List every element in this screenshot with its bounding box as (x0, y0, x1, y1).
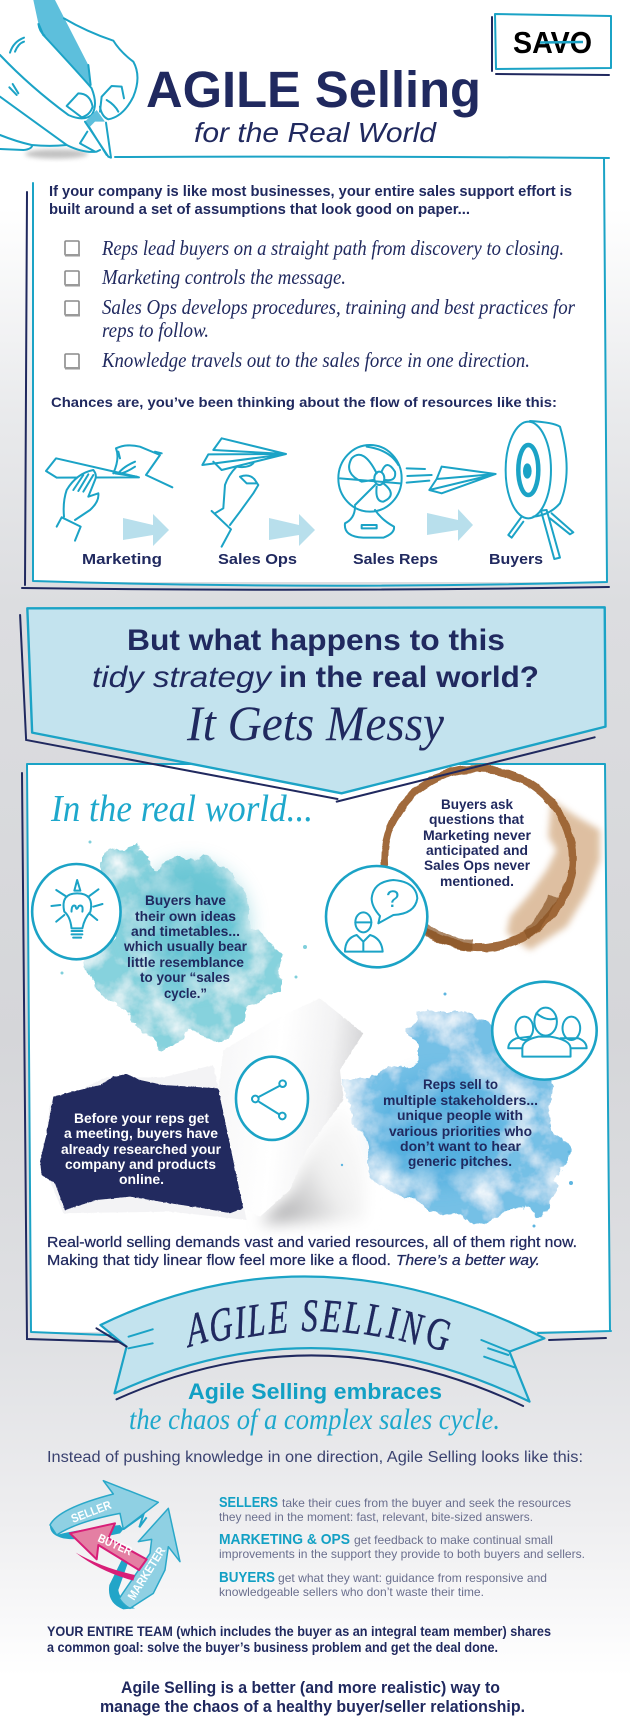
blue watercolor splash (341, 992, 573, 1228)
icon: hands folding paper (46, 445, 172, 541)
closing text: Making that tidy linear flow feel more like a flood. (47, 1253, 391, 1269)
coffee stain (384, 769, 600, 950)
icon: stakeholders (492, 982, 597, 1080)
ribbon text: I (384, 1295, 403, 1350)
ribbon text: L (341, 1290, 363, 1345)
flow labels: Buyers (489, 551, 543, 568)
icon: share nodes (236, 1057, 308, 1140)
icon: target (506, 421, 573, 559)
ribbon text: E (266, 1290, 289, 1345)
ribbon text: A (181, 1300, 210, 1358)
banner subheading (92, 661, 539, 694)
checklist: Reps lead buyers on a straight path from discovery to closing. (101, 236, 564, 260)
subtitle: for the Real World (194, 117, 438, 148)
arrow labels: MARKETER (125, 1544, 168, 1603)
text: buyers have: little resemblance (127, 955, 244, 970)
banner subheading: in the real world? (279, 661, 539, 694)
banner: but what happens (20, 607, 606, 802)
ribbon: agile selling (96, 1276, 544, 1406)
text: sellers, marketing, buyers: take their cues from the buyer and seek the resources (282, 1496, 571, 1510)
text: buyers ask: mentioned. (440, 874, 514, 889)
text: reps sell: unique people with (397, 1108, 523, 1123)
text: reps sell: various priorities who (389, 1124, 532, 1139)
panel: in the real world (22, 764, 611, 1342)
text: before your reps: Before your reps get (74, 1111, 210, 1126)
arrow labels (69, 1498, 168, 1603)
text: sellers, marketing, buyers: BUYERS (219, 1569, 275, 1586)
text: buyers ask: anticipated and (426, 843, 528, 858)
text: reps sell: multiple stakeholders... (383, 1093, 538, 1108)
text: buyers have: cycle.” (164, 986, 207, 1001)
torn paper (40, 998, 367, 1223)
flow labels (82, 551, 543, 568)
ribbon text: G (423, 1304, 454, 1363)
conclusion: Agile Selling is a better (and more realistic) way to (121, 1679, 500, 1697)
text: buyers have: their own ideas (135, 909, 236, 924)
icon: light bulb (32, 864, 121, 959)
buyer arrow (70, 1523, 147, 1581)
icon: fan blowing paper plane (338, 445, 496, 538)
text: buyers have: Buyers have (145, 893, 226, 908)
text: buyers have (123, 893, 248, 1001)
intro text: If your company is like most businesses, your entire sales support effort is (49, 184, 572, 200)
heading: agile selling embraces: Agile Selling embraces (188, 1379, 442, 1404)
text: sellers, marketing, buyers: get feedback to make continual small (354, 1533, 553, 1547)
text: before your reps: company and products (65, 1157, 216, 1172)
text: sellers, marketing, buyers: MARKETING & OPS (219, 1531, 350, 1548)
intro sentence: Instead of pushing knowledge in one direction, Agile Selling looks like this: (47, 1449, 583, 1466)
text: before your reps: a meeting, buyers have (64, 1126, 219, 1141)
text: sellers, marketing, buyers: knowledgeable sellers who don’t waste their time. (219, 1585, 484, 1599)
text: reps sell: Reps sell to (423, 1077, 498, 1092)
text: sellers, marketing, buyers: get what they want: guidance from responsive and (278, 1571, 547, 1585)
flow diagram (46, 421, 573, 559)
closing text (47, 1235, 577, 1269)
flow labels: Marketing (82, 551, 162, 568)
intro text (49, 184, 572, 218)
ribbon text: S (301, 1289, 318, 1341)
ribbon text: N (397, 1299, 427, 1357)
ribbon text: I (232, 1295, 250, 1350)
closing text: There’s a better way. (396, 1253, 540, 1269)
flow caption: Chances are, you’ve been thinking about the flow of resources like this: (51, 394, 557, 410)
intro text: built around a set of assumptions that look good on paper... (49, 202, 470, 218)
arrow labels: BUYER (96, 1531, 135, 1558)
diagram: agile cycle arrows (50, 1481, 180, 1609)
logo: SAVO (492, 14, 611, 75)
banner subheading: tidy strategy (92, 661, 273, 694)
it gets messy: It Gets Messy (186, 695, 445, 751)
text: buyers have: to your “sales (140, 970, 230, 985)
seller arrow (50, 1481, 158, 1539)
flow labels: Sales Ops (218, 551, 297, 568)
conclusion: manage the chaos of a healthy buyer/seller relationship. (100, 1698, 525, 1716)
icon: person with question (326, 866, 427, 967)
text: reps sell: generic pitches. (408, 1154, 512, 1169)
text: before your reps: online. (119, 1172, 164, 1187)
panel: intro assumptions (22, 157, 609, 590)
text: reps sell: don’t want to hear (400, 1139, 522, 1154)
text: sellers, marketing, buyers (219, 1494, 585, 1599)
text: buyers ask: Buyers ask (441, 797, 513, 812)
text: reps sell (383, 1077, 538, 1169)
teal watercolor splash (60, 840, 307, 1050)
heading: in the real world: In the real world... (50, 788, 313, 830)
question mark: ? (386, 886, 399, 913)
text: buyers have: and timetables... (131, 924, 240, 939)
conclusion (100, 1679, 525, 1716)
ribbon text: E (320, 1289, 342, 1343)
text: buyers ask (423, 797, 532, 889)
subheading: chaos: the chaos of a complex sales cycle. (129, 1403, 500, 1436)
text: buyers ask: Marketing never (423, 828, 532, 843)
icon: hand with pen (0, 0, 137, 159)
logo: SAVO: SAVO (513, 25, 592, 60)
text: your entire team: YOUR ENTIRE TEAM (which includes the buyer as an integral team member) shares (47, 1624, 551, 1639)
flow arrows (123, 509, 473, 546)
flow labels: Sales Reps (353, 551, 438, 568)
text: sellers, marketing, buyers: improvements in the support they provide to both buyers and sellers. (219, 1547, 585, 1561)
banner heading: But what happens to this (127, 624, 505, 657)
ribbon text: L (363, 1292, 386, 1348)
checklist: Sales Ops develops procedures, training and best practices for (102, 295, 576, 319)
checklist: reps to follow. (102, 318, 209, 342)
text: buyers have: which usually bear (123, 939, 248, 954)
marketer arrow (109, 1508, 180, 1609)
text: buyers ask: Sales Ops never (424, 858, 531, 873)
text: before your reps: already researched your (61, 1142, 222, 1157)
text: sellers, marketing, buyers: SELLERS (219, 1494, 278, 1511)
text: your entire team: a common goal: solve the buyer’s business problem and get the deal done. (47, 1640, 498, 1655)
text: buyers ask: questions that (429, 812, 525, 827)
text: sellers, marketing, buyers: they need in the moment: fast, relevant, bite-sized answers. (219, 1510, 533, 1524)
title: AGILE Selling (146, 61, 481, 118)
ribbon text: L (245, 1293, 267, 1348)
text: before your reps (61, 1111, 222, 1187)
checklist: Marketing controls the message. (101, 265, 346, 289)
ribbon text: G (206, 1296, 235, 1353)
arrow labels: SELLER (69, 1498, 114, 1526)
checklist: Knowledge travels out to the sales force in one direction. (101, 348, 530, 372)
icon: hand holding paper plane (202, 438, 286, 547)
checklist (65, 236, 576, 372)
closing text: Real-world selling demands vast and varied resources, all of them right now. (47, 1235, 577, 1251)
text: your entire team (47, 1624, 551, 1655)
